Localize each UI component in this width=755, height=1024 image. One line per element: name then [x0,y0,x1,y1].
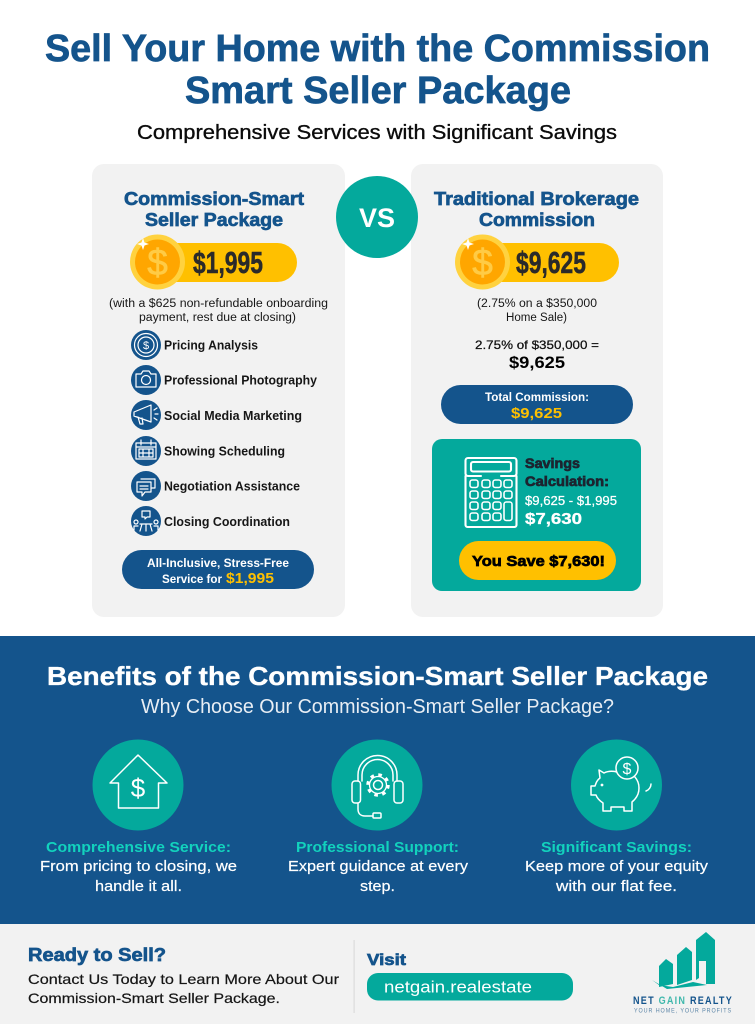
logo: net gain realty [633,932,733,1014]
panel: traditional brokerage commission [411,164,663,617]
logo: net gain realty: YOUR HOME, YOUR PROFITS [634,1008,732,1014]
savings text: $7,630 [525,511,582,528]
benefits subheading: Why Choose Our Commission-Smart Seller Package? [141,696,614,718]
savings text: $9,625 - $1,995 [525,494,617,508]
icon: calculator [466,458,516,527]
commission note: Home Sale) [506,312,567,324]
commission formula: $9,625 [509,354,565,372]
visit website: Visit [367,952,407,969]
call to action: Ready to Sell? [28,945,166,965]
callout: all-inclusive service: Service for [162,574,223,586]
benefit: comprehensive service: From pricing to closing, we [40,858,237,875]
benefit: significant savings: with our flat fee. [555,878,677,895]
icon: support headset with gear [332,740,422,830]
benefit: significant savings [525,839,709,895]
panel: footer [0,924,755,1024]
service: showing scheduling: Showing Scheduling [164,444,285,458]
title [45,28,710,112]
icon: closing coordination [131,506,161,536]
service: pricing analysis: Pricing Analysis [164,338,258,352]
commission formula: 2.75% of $350,000 = [475,338,599,352]
price pill: $1,995: $1,995 [193,245,263,280]
icon: house with dollar [92,740,184,830]
panel heading [434,188,639,230]
panel: savings calculation [432,439,641,591]
icon: showing scheduling [131,436,161,466]
benefit: professional support: Expert guidance at every [288,858,469,875]
panel heading: Commission-Smart [124,188,304,209]
icon: negotiation assistance [131,471,161,501]
total commission pill: $9,625 [511,406,562,422]
benefits heading: Benefits of the Commission-Smart Seller Package [47,661,708,691]
total commission pill: Total Commission: [485,392,589,404]
title: Smart Seller Package [185,70,571,112]
callout: all-inclusive service: All-Inclusive, Stress-Free [147,558,289,570]
price pill: $9,625: $ [472,242,493,283]
icon: social media marketing [131,400,161,430]
panel: benefits [0,636,755,924]
subtitle: Comprehensive Services with Significant Savings [137,122,617,144]
benefit: significant savings: Keep more of your equity [525,858,709,875]
icon: house with dollar: $ [131,773,146,803]
service: negotiation assistance: Negotiation Assistance [164,480,300,494]
price pill: $1,995 [130,234,297,290]
callout: all-inclusive service [122,550,314,589]
payment note: (with a $625 non-refundable onboarding [109,298,328,310]
payment note [109,298,328,324]
benefit: comprehensive service: Comprehensive Service: [46,839,231,856]
visit website: netgain.realestate [384,978,532,996]
icon: professional photography [131,365,161,395]
call to action: Commission-Smart Seller Package. [28,990,280,1006]
icon: pricing analysis: $ [143,340,149,352]
visit website [367,952,573,1000]
panel heading: Commission [479,209,595,230]
call to action [28,945,339,1006]
you save pill: You Save $7,630! [472,553,605,570]
panel heading [124,188,304,230]
benefit: comprehensive service [40,839,237,895]
call to action: Contact Us Today to Learn More About Our [28,971,339,987]
vs badge [336,176,418,258]
panel: commission-smart seller package [92,164,345,617]
benefit: professional support [288,839,469,895]
payment note: payment, rest due at closing) [139,312,296,324]
panel heading: Seller Package [145,209,283,230]
panel heading: Traditional Brokerage [434,188,639,209]
total commission pill [441,385,633,424]
savings text [525,455,617,528]
service: closing coordination: Closing Coordination [164,515,290,529]
title: Sell Your Home with the Commission [45,28,710,70]
benefit: significant savings: Significant Savings: [541,839,692,856]
vs badge: VS [359,203,395,233]
icon: pricing analysis [131,330,161,360]
benefit: comprehensive service: handle it all. [95,878,182,895]
icon: piggy bank with coin: $ [623,761,632,778]
icon: piggy bank with coin [571,740,662,830]
benefit: professional support: Professional Support: [296,839,459,856]
you save pill [459,541,616,580]
commission formula [475,338,599,372]
price pill: $9,625: $9,625 [516,245,586,280]
service: professional photography: Professional Photography [164,374,317,388]
callout: all-inclusive service: $1,995 [226,571,274,587]
price pill: $1,995: $ [147,242,168,283]
commission note: (2.75% on a $350,000 [477,298,597,310]
service: social media marketing: Social Media Marketing [164,409,302,423]
price pill: $9,625 [455,234,619,290]
commission note [477,298,597,324]
savings text: Savings [525,455,580,471]
logo: net gain realty: NET GAIN REALTY [633,995,733,1007]
benefit: professional support: step. [360,878,395,895]
savings text: Calculation: [525,473,609,489]
